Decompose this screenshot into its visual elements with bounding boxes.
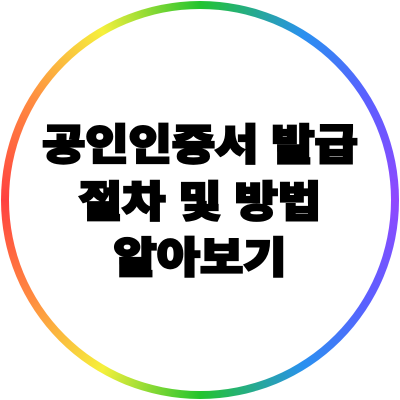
- title line 1: 공인인증서 발급: [42, 121, 358, 168]
- title line 2: 절차 및 방법: [79, 178, 321, 225]
- title line 3: 알아보기: [114, 234, 286, 281]
